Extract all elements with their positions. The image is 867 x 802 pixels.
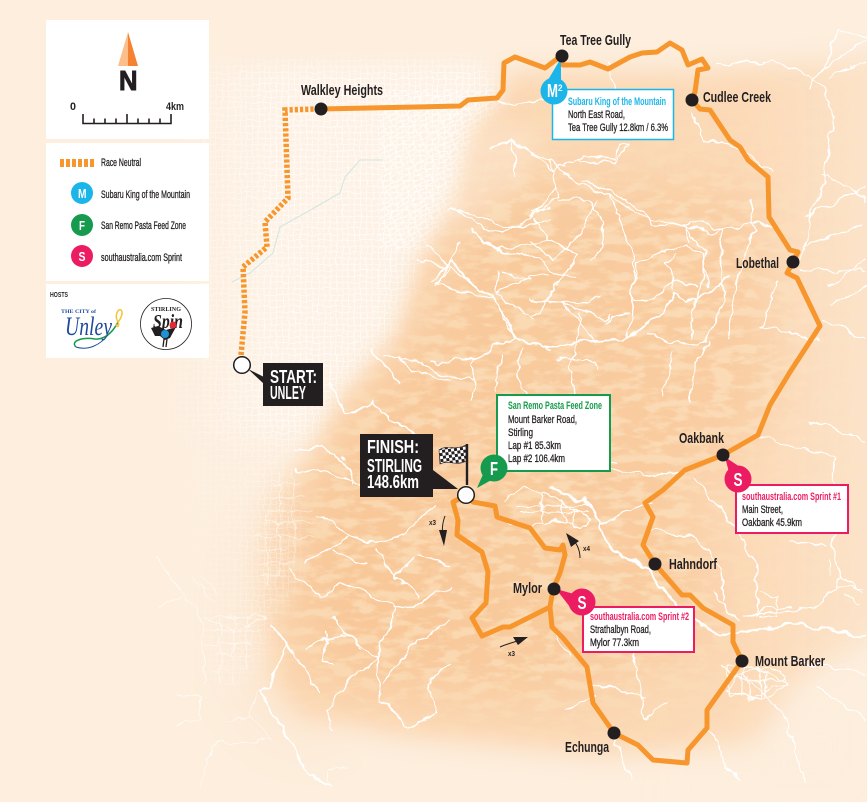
callout: feed zone: Stirling xyxy=(508,427,533,439)
logo: City of Unley xyxy=(61,310,122,348)
town: Walkley Heights: Walkley Heights xyxy=(301,82,383,99)
start marker xyxy=(234,357,250,373)
town: Mylor: Mylor xyxy=(513,580,542,597)
hosts heading: HOSTS xyxy=(50,292,68,299)
logo: City of Unley: Unley xyxy=(65,312,112,341)
race neutral route xyxy=(241,109,316,355)
finish callout: STIRLING xyxy=(367,456,422,476)
suburban street grid xyxy=(193,57,508,678)
icon: north arrow xyxy=(118,32,138,96)
direction arrow: x3 south: x3 xyxy=(508,651,515,658)
start callout xyxy=(248,363,323,406)
marker: king of the mountain: M xyxy=(547,81,558,101)
callout: feed zone xyxy=(497,395,610,471)
finish marker xyxy=(458,487,474,503)
scale bar xyxy=(70,101,184,124)
start callout: START: xyxy=(270,367,317,387)
callout: king of the mountain: North East Road, xyxy=(568,109,625,121)
callout: sprint 2: Strathalbyn Road, xyxy=(590,624,651,636)
town: Tea Tree Gully: Tea Tree Gully xyxy=(560,32,631,49)
callout: king of the mountain: Subaru King of the Mountain xyxy=(568,96,666,108)
direction arrow: x4: x4 xyxy=(583,546,590,553)
callout: king of the mountain: Tea Tree Gully 12.8km / 6.3% xyxy=(568,122,668,134)
marker: king of the mountain: 2 xyxy=(558,83,562,93)
finish callout: FINISH: xyxy=(367,437,419,457)
panel: legend xyxy=(46,143,209,281)
hills road network xyxy=(157,30,865,787)
start callout: UNLEY xyxy=(270,383,306,403)
town: Walkley Heights xyxy=(301,82,383,116)
legend: king of the mountain xyxy=(71,182,190,204)
scale bar: 4km xyxy=(166,101,184,113)
town: Echunga: Echunga xyxy=(565,739,609,756)
direction arrow: x3 west xyxy=(429,516,447,546)
callout: feed zone: Lap #1 85.3km xyxy=(508,440,561,452)
marker: feed zone xyxy=(477,454,508,488)
callout: sprint 1: Oakbank 45.9km xyxy=(742,517,802,529)
town: Oakbank xyxy=(679,430,730,462)
logo: Stirling Spin xyxy=(140,298,192,350)
legend: sprint: S xyxy=(78,249,86,264)
map background xyxy=(234,54,867,764)
town: Cudlee Creek: Cudlee Creek xyxy=(703,89,771,106)
callout: sprint 2: southaustralia.com Sprint #2 xyxy=(590,611,689,623)
town: Mount Barker: Mount Barker xyxy=(755,653,825,670)
icon: chequered flag xyxy=(439,444,467,485)
callout: sprint 2 xyxy=(583,607,694,652)
callout: feed zone: Mount Barker Road, xyxy=(508,414,577,426)
marker: feed zone: F xyxy=(490,459,498,479)
legend: race neutral xyxy=(60,157,141,169)
callout: sprint 1: Main Street, xyxy=(742,504,783,516)
marker: sprint 2: S xyxy=(578,593,586,613)
town: Hahndorf: Hahndorf xyxy=(669,556,718,573)
marker: sprint 1: S xyxy=(734,470,742,490)
legend: feed zone xyxy=(71,214,186,236)
logo: City of Unley: THE CITY of xyxy=(61,310,96,315)
direction arrow: x3 south xyxy=(500,637,528,658)
finish callout xyxy=(360,434,458,497)
town: Echunga xyxy=(565,726,620,756)
callout: sprint 2: Mylor 77.3km xyxy=(590,637,639,649)
legend: king of the mountain: Subaru King of the Mountain xyxy=(101,189,190,201)
finish callout: 148.6km xyxy=(367,472,419,492)
legend: feed zone: F xyxy=(79,218,85,233)
legend: feed zone: San Remo Pasta Feed Zone xyxy=(101,220,186,232)
main race route xyxy=(321,43,820,763)
legend: race neutral: Race Neutral xyxy=(101,157,141,169)
town: Lobethal: Lobethal xyxy=(736,255,779,272)
marker: sprint 2 xyxy=(556,588,596,616)
callout: feed zone: San Remo Pasta Feed Zone xyxy=(508,400,602,412)
town: Tea Tree Gully xyxy=(556,32,631,62)
panel: compass and scale xyxy=(46,20,209,139)
logo: Stirling Spin: Spin xyxy=(153,311,183,333)
town: Cudlee Creek xyxy=(686,89,771,106)
icon: north arrow: N xyxy=(119,65,138,96)
callout: feed zone: Lap #2 106.4km xyxy=(508,453,565,465)
town: Mount Barker xyxy=(736,653,825,670)
legend: sprint xyxy=(71,245,182,267)
legend: sprint: southaustralia.com Sprint xyxy=(101,252,182,264)
river xyxy=(232,160,383,282)
town: Oakbank: Oakbank xyxy=(679,430,724,447)
direction arrow: x4 xyxy=(566,533,590,558)
callout: sprint 1 xyxy=(736,485,848,533)
marker: king of the mountain xyxy=(540,58,568,104)
town: Hahndorf xyxy=(648,556,718,573)
legend: king of the mountain: M xyxy=(78,186,86,201)
callout: king of the mountain xyxy=(552,90,674,140)
panel: hosts xyxy=(46,284,209,358)
scale bar: 0 xyxy=(70,101,76,113)
direction arrow: x3 west: x3 xyxy=(429,520,436,527)
marker: sprint 1 xyxy=(724,457,752,492)
logo: Stirling Spin: STIRLING xyxy=(151,307,181,313)
